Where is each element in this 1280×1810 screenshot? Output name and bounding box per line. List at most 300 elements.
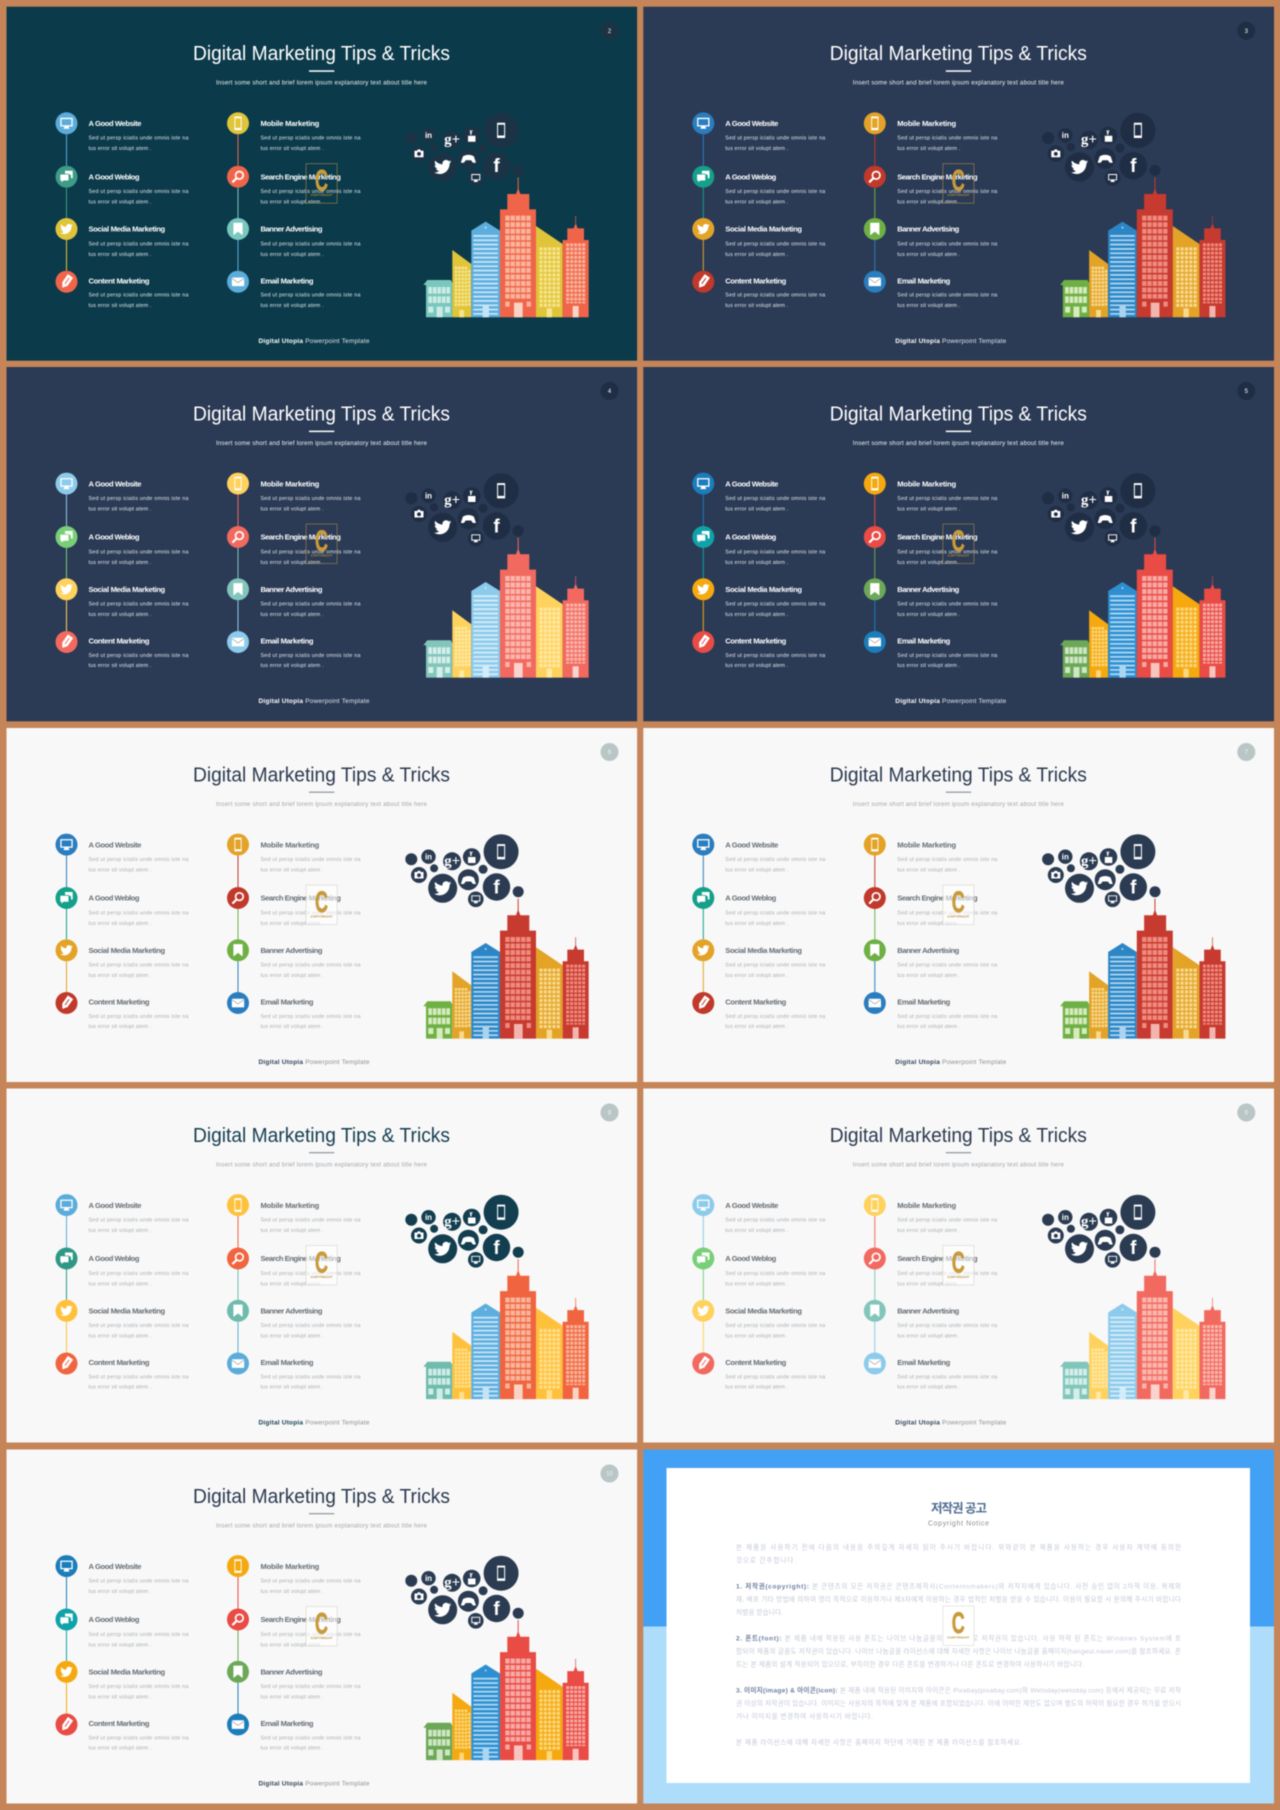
- item: Content Marketing: Sed ut persp iciatis unde omnis iste na: [725, 1374, 825, 1380]
- title underline: [309, 1513, 334, 1514]
- city illustration: [1060, 177, 1225, 317]
- item: Email Marketing: Email Marketing: [897, 637, 951, 646]
- item: Search Engine Marketing: tus error sit volupt atem .: [260, 1642, 324, 1648]
- item: Banner Advertising: Banner Advertising: [897, 1307, 960, 1316]
- slide 9: light pastel theme: [643, 1088, 1274, 1442]
- item: A Good Website: [692, 112, 825, 166]
- icon cloud: g+: [444, 1575, 460, 1591]
- item: Content Marketing: [56, 271, 188, 309]
- item: Search Engine Marketing: tus error sit volupt atem .: [897, 200, 960, 206]
- footer: Digital Utopia Powerpoint Template: [895, 1059, 1007, 1066]
- watermark: [943, 524, 974, 564]
- page number: [600, 1464, 618, 1482]
- footer: Digital Utopia Powerpoint Template: [895, 1420, 1007, 1427]
- item: A Good Weblog: [56, 887, 188, 939]
- watermark: [306, 164, 337, 203]
- subtitle: Insert some short and brief lorem ipsum explanatory text about title here: [216, 440, 428, 447]
- item: Content Marketing: Content Marketing: [725, 276, 787, 285]
- item: Banner Advertising: tus error sit volupt atem .: [260, 973, 324, 979]
- item: Search Engine Marketing: Sed ut persp iciatis unde omnis iste na: [260, 189, 360, 195]
- paragraph 2: font: [736, 1633, 1181, 1668]
- icon cloud: f: [493, 516, 500, 538]
- item: Content Marketing: tus error sit volupt atem .: [88, 303, 152, 309]
- watermark: COPYRIGHT: [310, 914, 333, 918]
- item: Email Marketing: Sed ut persp iciatis unde omnis iste na: [260, 1374, 360, 1380]
- item: Mobile Marketing: Sed ut persp iciatis unde omnis iste na: [897, 136, 997, 142]
- item: Content Marketing: Content Marketing: [88, 637, 150, 646]
- slide background: [643, 7, 1274, 361]
- city illustration: [423, 899, 589, 1039]
- item: A Good Weblog: Sed ut persp iciatis unde omnis iste na: [725, 910, 825, 916]
- item: Search Engine Marketing: tus error sit volupt atem .: [897, 1281, 960, 1287]
- slide background: [6, 1450, 637, 1804]
- item: A Good Website: tus error sit volupt atem .: [88, 1589, 152, 1595]
- item: Email Marketing: Email Marketing: [897, 998, 951, 1007]
- icon cloud: f: [1130, 516, 1137, 538]
- item: Banner Advertising: Banner Advertising: [260, 225, 323, 234]
- item: A Good Website: A Good Website: [88, 1562, 142, 1571]
- item: A Good Weblog: tus error sit volupt atem .: [88, 560, 152, 566]
- item: Banner Advertising: Sed ut persp iciatis unde omnis iste na: [897, 602, 997, 608]
- page number: 3: [1245, 29, 1249, 35]
- intro paragraph: 것으로 간주합니다.: [736, 1555, 796, 1564]
- page number: 10: [606, 1472, 613, 1478]
- white notice panel: [666, 1468, 1250, 1783]
- item: Social Media Marketing: Sed ut persp iciatis unde omnis iste na: [725, 602, 825, 608]
- item: Search Engine Marketing: [227, 887, 360, 939]
- item: Search Engine Marketing: Sed ut persp iciatis unde omnis iste na: [260, 549, 360, 555]
- item: Banner Advertising: tus error sit volupt atem .: [260, 1334, 324, 1340]
- item: Email Marketing: Email Marketing: [260, 998, 314, 1007]
- item: Banner Advertising: Banner Advertising: [897, 225, 960, 234]
- item: Email Marketing: [227, 271, 360, 309]
- item: A Good Weblog: tus error sit volupt atem .: [88, 1281, 152, 1287]
- item: Social Media Marketing: [692, 939, 825, 992]
- item: Search Engine Marketing: Search Engine Marketing: [260, 1615, 341, 1624]
- item: Social Media Marketing: tus error sit volupt atem .: [725, 252, 788, 258]
- subtitle: Insert some short and brief lorem ipsum explanatory text about title here: [853, 80, 1064, 87]
- icon cloud: g+: [1081, 854, 1097, 870]
- subtitle: Insert some short and brief lorem ipsum explanatory text about title here: [216, 80, 428, 87]
- slide 6: light theme: [6, 728, 637, 1082]
- icon cloud: [405, 1556, 524, 1629]
- page number: [1237, 1104, 1255, 1122]
- item: A Good Weblog: Sed ut persp iciatis unde omnis iste na: [88, 189, 188, 195]
- item: Search Engine Marketing: Search Engine Marketing: [260, 172, 341, 181]
- icon cloud: in: [425, 1574, 432, 1583]
- item: Banner Advertising: [864, 578, 997, 631]
- icon cloud: f: [1130, 878, 1137, 898]
- item: A Good Website: [56, 834, 188, 887]
- item: Social Media Marketing: tus error sit volupt atem .: [88, 1695, 152, 1701]
- item: Mobile Marketing: Sed ut persp iciatis unde omnis iste na: [260, 496, 360, 502]
- title: Digital Marketing Tips & Tricks: [193, 763, 450, 786]
- item: Email Marketing: [227, 631, 360, 669]
- item: Social Media Marketing: Sed ut persp iciatis unde omnis iste na: [88, 1323, 188, 1329]
- item: A Good Weblog: Sed ut persp iciatis unde omnis iste na: [88, 910, 188, 916]
- watermark: C: [315, 886, 328, 919]
- item: A Good Website: [56, 112, 188, 166]
- item: A Good Website: Sed ut persp iciatis unde omnis iste na: [88, 136, 188, 142]
- footer: Digital Utopia Powerpoint Template: [258, 1781, 370, 1788]
- footer: Digital Utopia Powerpoint Template: [258, 338, 370, 345]
- icon cloud: g+: [1081, 132, 1097, 148]
- title underline: [309, 792, 334, 793]
- item: Email Marketing: [227, 992, 360, 1030]
- item: Banner Advertising: Banner Advertising: [260, 1668, 323, 1677]
- paragraph 3: images and icons: 권 이상의 저작권이 있습니다. 이미지는 사용자의 목적에 맞게 본 제품에 포함되었습니다. 이에 어떠한 제한도 없으며 별도의 허락이 필요한 경우 허가를 받으시: [736, 1698, 1181, 1707]
- item: Mobile Marketing: tus error sit volupt atem .: [260, 1228, 324, 1234]
- city illustration: [1060, 538, 1225, 678]
- item: A Good Website: tus error sit volupt atem .: [725, 506, 788, 512]
- watermark: C: [315, 165, 328, 198]
- watermark: COPYRIGHT: [947, 193, 969, 197]
- watermark: COPYRIGHT: [310, 193, 333, 197]
- item: Email Marketing: [864, 631, 997, 669]
- city illustration: [1060, 899, 1225, 1039]
- icon cloud: g+: [444, 132, 460, 148]
- icon cloud: g+: [1081, 1214, 1097, 1230]
- page number: 9: [1245, 1111, 1249, 1117]
- item: Mobile Marketing: [864, 473, 997, 526]
- item: Content Marketing: tus error sit volupt atem .: [725, 663, 788, 669]
- slide background: [6, 367, 637, 721]
- item: Search Engine Marketing: Search Engine Marketing: [897, 1254, 978, 1263]
- watermark: [943, 1246, 974, 1285]
- item: Content Marketing: Content Marketing: [725, 637, 787, 646]
- item: Email Marketing: [227, 1714, 360, 1752]
- item: A Good Weblog: A Good Weblog: [725, 533, 777, 542]
- title underline: [946, 431, 971, 432]
- item: Mobile Marketing: [227, 473, 360, 526]
- item: A Good Weblog: [692, 166, 825, 218]
- item: Email Marketing: tus error sit volupt atem .: [260, 1024, 324, 1030]
- watermark: [306, 885, 337, 924]
- item: Social Media Marketing: tus error sit volupt atem .: [725, 1334, 788, 1340]
- item: Banner Advertising: tus error sit volupt atem .: [897, 973, 960, 979]
- item: Content Marketing: Sed ut persp iciatis unde omnis iste na: [88, 1014, 188, 1020]
- icon cloud: f: [493, 878, 500, 898]
- item: Email Marketing: tus error sit volupt atem .: [897, 1385, 960, 1391]
- page number: 4: [608, 389, 612, 395]
- footer: Digital Utopia Powerpoint Template: [258, 1059, 370, 1066]
- title: Digital Marketing Tips & Tricks: [830, 763, 1087, 786]
- item: Social Media Marketing: [56, 578, 188, 631]
- page number: 6: [608, 750, 612, 756]
- item: Email Marketing: Sed ut persp iciatis unde omnis iste na: [260, 1014, 360, 1020]
- item: Search Engine Marketing: Search Engine Marketing: [260, 533, 341, 542]
- slide 11: copyright notice: [643, 1450, 1274, 1804]
- item: Banner Advertising: Banner Advertising: [260, 585, 323, 594]
- page number: [1237, 743, 1255, 761]
- subtitle: Insert some short and brief lorem ipsum explanatory text about title here: [853, 440, 1064, 447]
- watermark: COPYRIGHT: [310, 554, 333, 558]
- city illustration: [423, 538, 589, 678]
- icon cloud: in: [425, 852, 432, 862]
- slide 2: teal theme: [6, 7, 637, 361]
- page number: [600, 1104, 618, 1122]
- paragraph 1: copyright: 재, 배포 기타 방법에 의하여 영리 목적으로 이용하거나 제3자에게 이용하는 경우 법적인 처벌을 받을 수 있습니다. 이용이 필요할 시 문의해 주시기 바랍니다: [736, 1594, 1181, 1603]
- item: Social Media Marketing: [692, 1300, 825, 1352]
- item: A Good Website: Sed ut persp iciatis unde omnis iste na: [725, 857, 825, 863]
- item: A Good Weblog: A Good Weblog: [725, 1254, 777, 1263]
- item: Social Media Marketing: [56, 1661, 188, 1714]
- slide 4: navy pastel theme: [6, 367, 637, 721]
- item: Mobile Marketing: Mobile Marketing: [260, 1562, 320, 1571]
- item: Search Engine Marketing: [227, 526, 360, 578]
- item: Email Marketing: Sed ut persp iciatis unde omnis iste na: [897, 653, 997, 659]
- item: Email Marketing: Sed ut persp iciatis unde omnis iste na: [897, 1014, 997, 1020]
- item: Social Media Marketing: tus error sit volupt atem .: [88, 973, 152, 979]
- item: Banner Advertising: Banner Advertising: [260, 1307, 323, 1316]
- item: Content Marketing: tus error sit volupt atem .: [88, 1385, 152, 1391]
- item: Content Marketing: Sed ut persp iciatis unde omnis iste na: [725, 293, 825, 299]
- slide 8: light teal-cloud theme: [6, 1088, 637, 1442]
- item: Email Marketing: Email Marketing: [260, 1358, 314, 1367]
- icon cloud: in: [1062, 1213, 1069, 1222]
- item: Banner Advertising: Sed ut persp iciatis unde omnis iste na: [260, 241, 360, 247]
- slide 3: navy theme: [643, 7, 1274, 361]
- item: Email Marketing: Sed ut persp iciatis unde omnis iste na: [897, 1374, 997, 1380]
- item: Content Marketing: [56, 631, 188, 669]
- icon cloud: f: [1130, 1238, 1137, 1259]
- item: Search Engine Marketing: [864, 526, 997, 578]
- item: Email Marketing: Sed ut persp iciatis unde omnis iste na: [897, 293, 997, 299]
- item: Banner Advertising: [227, 218, 360, 271]
- intro paragraph: [736, 1542, 1181, 1564]
- item: A Good Website: Sed ut persp iciatis unde omnis iste na: [88, 496, 188, 502]
- item: Email Marketing: Email Marketing: [897, 276, 951, 285]
- item: Social Media Marketing: Sed ut persp iciatis unde omnis iste na: [725, 1323, 825, 1329]
- item: A Good Website: Sed ut persp iciatis unde omnis iste na: [88, 857, 188, 863]
- icon cloud: g+: [1081, 492, 1097, 508]
- item: Mobile Marketing: Mobile Marketing: [897, 479, 956, 488]
- watermark: C: [952, 165, 965, 198]
- icon cloud: [1042, 834, 1160, 907]
- item: A Good Weblog: [692, 887, 825, 939]
- item: Mobile Marketing: Sed ut persp iciatis unde omnis iste na: [260, 1578, 360, 1584]
- item: Email Marketing: Email Marketing: [260, 637, 314, 646]
- item: Social Media Marketing: [692, 578, 825, 631]
- footer: Digital Utopia Powerpoint Template: [895, 698, 1007, 705]
- page number: 5: [1245, 389, 1249, 395]
- item: Content Marketing: tus error sit volupt atem .: [88, 1024, 152, 1030]
- icon cloud: in: [425, 1213, 432, 1222]
- title: Digital Marketing Tips & Tricks: [830, 402, 1087, 425]
- item: Social Media Marketing: Social Media Marketing: [88, 1668, 166, 1677]
- item: A Good Website: Sed ut persp iciatis unde omnis iste na: [88, 1217, 188, 1223]
- item: Social Media Marketing: tus error sit volupt atem .: [88, 1334, 152, 1340]
- item: Content Marketing: [56, 1352, 188, 1391]
- icon cloud: [1042, 473, 1160, 546]
- notice heading: 저작권 공고: [931, 1500, 987, 1516]
- item: A Good Weblog: tus error sit volupt atem .: [725, 1281, 788, 1287]
- item: Social Media Marketing: tus error sit volupt atem .: [88, 252, 152, 258]
- watermark: [306, 524, 337, 564]
- item: A Good Website: tus error sit volupt atem .: [88, 506, 152, 512]
- title underline: [309, 431, 334, 432]
- slide background: [643, 728, 1274, 1082]
- item: Mobile Marketing: tus error sit volupt atem .: [897, 1228, 960, 1234]
- item: Search Engine Marketing: Search Engine Marketing: [897, 533, 978, 542]
- icon cloud: f: [1130, 156, 1137, 177]
- item: Mobile Marketing: [227, 834, 360, 887]
- item: Search Engine Marketing: Sed ut persp iciatis unde omnis iste na: [260, 1632, 360, 1638]
- item: Email Marketing: tus error sit volupt atem .: [260, 1385, 324, 1391]
- subtitle: Insert some short and brief lorem ipsum explanatory text about title here: [216, 1161, 428, 1168]
- title: Digital Marketing Tips & Tricks: [193, 1124, 450, 1147]
- item: Email Marketing: [864, 271, 997, 309]
- item: Mobile Marketing: Mobile Marketing: [897, 119, 956, 128]
- item: Search Engine Marketing: tus error sit volupt atem .: [260, 1281, 324, 1287]
- item: Banner Advertising: [864, 939, 997, 992]
- slide background: [6, 728, 637, 1082]
- item: Content Marketing: Sed ut persp iciatis unde omnis iste na: [88, 1374, 188, 1380]
- item: Email Marketing: Sed ut persp iciatis unde omnis iste na: [260, 653, 360, 659]
- icon cloud: in: [425, 492, 432, 500]
- item: Mobile Marketing: [864, 112, 997, 166]
- item: A Good Weblog: Sed ut persp iciatis unde omnis iste na: [725, 549, 825, 555]
- item: Content Marketing: tus error sit volupt atem .: [88, 663, 152, 669]
- watermark: [943, 1606, 974, 1646]
- watermark: [943, 164, 974, 203]
- item: Social Media Marketing: tus error sit volupt atem .: [725, 612, 788, 618]
- item: A Good Weblog: Sed ut persp iciatis unde omnis iste na: [88, 1271, 188, 1277]
- item: Mobile Marketing: Mobile Marketing: [260, 119, 320, 128]
- watermark: COPYRIGHT: [947, 1636, 969, 1640]
- item: Content Marketing: Content Marketing: [725, 998, 787, 1007]
- item: Email Marketing: Sed ut persp iciatis unde omnis iste na: [260, 293, 360, 299]
- item: A Good Weblog: A Good Weblog: [88, 533, 140, 542]
- item: A Good Weblog: Sed ut persp iciatis unde omnis iste na: [88, 549, 188, 555]
- item: Mobile Marketing: Mobile Marketing: [897, 1201, 956, 1210]
- icon cloud: g+: [444, 854, 460, 870]
- page number: [600, 22, 618, 40]
- item: Banner Advertising: [227, 939, 360, 992]
- item: Content Marketing: Content Marketing: [88, 276, 150, 285]
- item: A Good Website: A Good Website: [725, 479, 778, 488]
- footer: Digital Utopia Powerpoint Template: [258, 1420, 370, 1427]
- item: Search Engine Marketing: tus error sit volupt atem .: [897, 921, 960, 927]
- item: A Good Weblog: Sed ut persp iciatis unde omnis iste na: [725, 189, 825, 195]
- item: Banner Advertising: [227, 578, 360, 631]
- item: Social Media Marketing: Social Media Marketing: [725, 585, 802, 594]
- item: A Good Website: [692, 1194, 825, 1248]
- icon cloud: [405, 473, 524, 546]
- icon cloud: [1042, 113, 1160, 186]
- item: A Good Weblog: [56, 1248, 188, 1300]
- item: Content Marketing: tus error sit volupt atem .: [725, 303, 788, 309]
- item: Email Marketing: tus error sit volupt atem .: [260, 663, 324, 669]
- item: Social Media Marketing: Social Media Marketing: [725, 1307, 802, 1316]
- item: Content Marketing: Content Marketing: [88, 998, 150, 1007]
- page number: [600, 382, 618, 400]
- title underline: [309, 70, 334, 72]
- item: A Good Website: Sed ut persp iciatis unde omnis iste na: [88, 1578, 188, 1584]
- item: Mobile Marketing: tus error sit volupt atem .: [897, 506, 960, 512]
- icon cloud: f: [493, 156, 500, 177]
- icon cloud: [405, 834, 524, 907]
- item: A Good Website: tus error sit volupt atem .: [88, 146, 152, 152]
- item: Social Media Marketing: Social Media Marketing: [88, 1307, 166, 1316]
- item: Banner Advertising: Sed ut persp iciatis unde omnis iste na: [260, 602, 360, 608]
- item: Search Engine Marketing: Search Engine Marketing: [260, 1254, 341, 1263]
- item: Search Engine Marketing: tus error sit volupt atem .: [260, 560, 324, 566]
- slide 7: light theme: [643, 728, 1274, 1082]
- item: Social Media Marketing: Sed ut persp iciatis unde omnis iste na: [88, 602, 188, 608]
- watermark: [943, 885, 974, 924]
- item: Mobile Marketing: tus error sit volupt atem .: [260, 867, 324, 873]
- item: Content Marketing: Content Marketing: [88, 1358, 150, 1367]
- paragraph 1: copyright: 1. 저작권(copyright): 본 콘텐츠의 모든 저작권은 콘텐츠제작사(Contentsmakers)와 저작자에게 있습니다. 사전 승인 없이 2차적 이용, 복제와: [736, 1581, 1181, 1590]
- item: Search Engine Marketing: Sed ut persp iciatis unde omnis iste na: [897, 189, 997, 195]
- item: Email Marketing: tus error sit volupt atem .: [260, 1746, 324, 1752]
- item: Social Media Marketing: [56, 939, 188, 992]
- icon cloud: in: [1062, 852, 1069, 862]
- paragraph 3: images and icons: 3. 이미지(image) & 아이콘(icon): 본 제품 내에 적용된 이미지와 아이콘은 Pixabay(pixabay.com)와 Wetoday(wetoday.com) 등에서 제공되는 무료 저작: [736, 1685, 1181, 1694]
- title underline: [946, 792, 971, 793]
- subtitle: Insert some short and brief lorem ipsum explanatory text about title here: [216, 1522, 428, 1529]
- item: Search Engine Marketing: Sed ut persp iciatis unde omnis iste na: [260, 1271, 360, 1277]
- item: Mobile Marketing: Mobile Marketing: [260, 840, 320, 849]
- city illustration: [423, 1620, 589, 1760]
- item: Search Engine Marketing: [864, 887, 997, 939]
- item: Content Marketing: Content Marketing: [725, 1358, 787, 1367]
- item: Social Media Marketing: Sed ut persp iciatis unde omnis iste na: [88, 241, 188, 247]
- item: Banner Advertising: tus error sit volupt atem .: [897, 1334, 960, 1340]
- watermark: [306, 1246, 337, 1285]
- item: Banner Advertising: [864, 218, 997, 271]
- item: A Good Weblog: [56, 166, 188, 218]
- item: Email Marketing: Email Marketing: [260, 1719, 314, 1728]
- item: Content Marketing: [692, 631, 825, 669]
- page number: [1237, 382, 1255, 400]
- item: Social Media Marketing: [56, 218, 188, 271]
- item: Social Media Marketing: Sed ut persp iciatis unde omnis iste na: [88, 1684, 188, 1690]
- subtitle: Insert some short and brief lorem ipsum explanatory text about title here: [853, 801, 1064, 808]
- item: Content Marketing: tus error sit volupt atem .: [88, 1746, 152, 1752]
- item: A Good Website: A Good Website: [88, 1201, 142, 1210]
- item: A Good Website: Sed ut persp iciatis unde omnis iste na: [725, 496, 825, 502]
- item: Search Engine Marketing: [227, 1608, 360, 1661]
- item: Mobile Marketing: Mobile Marketing: [260, 479, 320, 488]
- item: A Good Website: tus error sit volupt atem .: [88, 867, 152, 873]
- item: Content Marketing: Sed ut persp iciatis unde omnis iste na: [88, 293, 188, 299]
- item: Mobile Marketing: [227, 1555, 360, 1608]
- item: A Good Weblog: A Good Weblog: [88, 172, 140, 181]
- item: A Good Weblog: tus error sit volupt atem .: [725, 560, 788, 566]
- icon cloud: g+: [444, 1214, 460, 1230]
- item: Mobile Marketing: [227, 1194, 360, 1248]
- watermark: COPYRIGHT: [947, 1275, 969, 1279]
- item: A Good Weblog: Sed ut persp iciatis unde omnis iste na: [88, 1632, 188, 1638]
- slide 10: light vivid theme: [6, 1450, 637, 1804]
- item: A Good Website: A Good Website: [88, 479, 142, 488]
- closing line: 본 제품 라이선스에 대해 자세한 사항은 홈페이지 하단에 기재된 본 제품 라이선스를 참조하세요.: [736, 1737, 1022, 1746]
- item: A Good Website: tus error sit volupt atem .: [725, 146, 788, 152]
- paragraph 2: font: 트는 본 제품의 설계 적용되어 있으므로, 부득이한 경우 다른 폰트를 변경하거나 다른 폰트로 변경하여 사용하시기 바랍니다.: [736, 1659, 1084, 1668]
- item: Social Media Marketing: Social Media Marketing: [88, 225, 166, 234]
- subtitle: Insert some short and brief lorem ipsum explanatory text about title here: [216, 801, 428, 808]
- page number: 7: [1245, 750, 1249, 756]
- icon cloud: in: [1062, 492, 1069, 500]
- item: A Good Weblog: tus error sit volupt atem .: [88, 200, 152, 206]
- item: Social Media Marketing: Social Media Marketing: [725, 946, 802, 955]
- item: Email Marketing: tus error sit volupt atem .: [897, 663, 960, 669]
- item: Mobile Marketing: tus error sit volupt atem .: [260, 506, 324, 512]
- item: Content Marketing: Sed ut persp iciatis unde omnis iste na: [725, 653, 825, 659]
- notice subheading: Copyright Notice: [928, 1520, 989, 1528]
